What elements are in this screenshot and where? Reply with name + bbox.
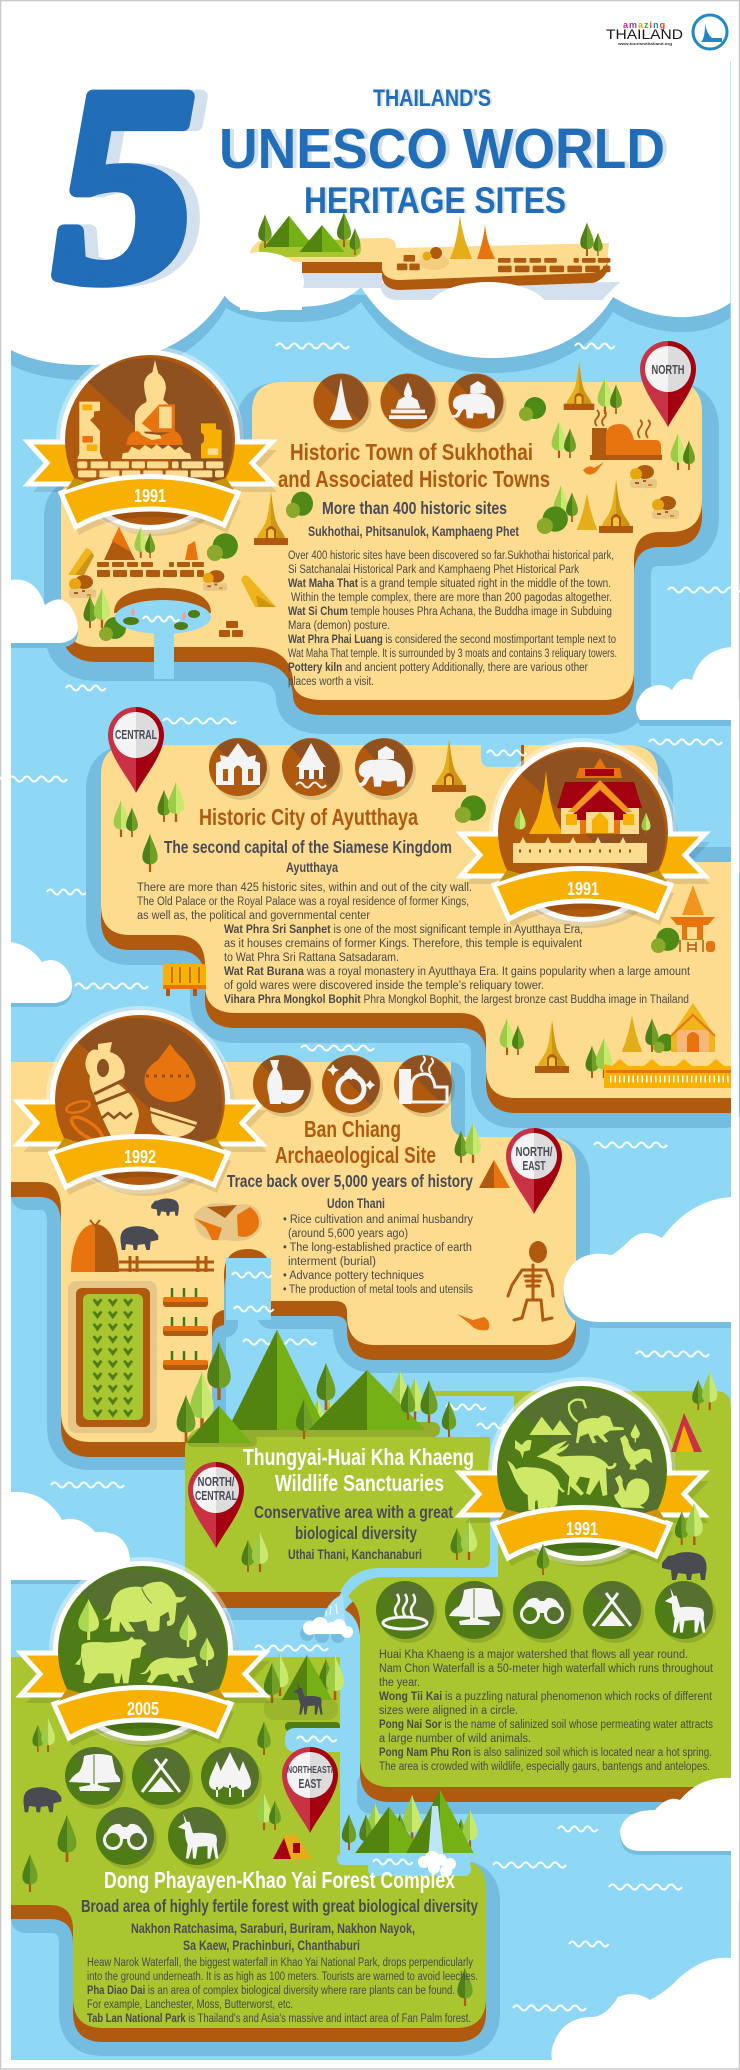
icon: forest trees bbox=[78, 1599, 214, 1666]
cloud: left 3 bbox=[11, 1492, 130, 1584]
pin label: EAST bbox=[522, 1158, 546, 1173]
body text: Ban Chiang: • The long-established practice of earth bbox=[283, 1242, 472, 1254]
header island bbox=[220, 212, 620, 342]
subheading: Ban Chiang: Udon Thani bbox=[327, 1195, 385, 1211]
heading: Sukhothai bbox=[278, 439, 550, 492]
illustrations: Ayutthaya upper bbox=[114, 739, 486, 872]
body text: Sukhothai: Pottery kiln and ancient pottery Additionally, there are various other bbox=[288, 662, 588, 674]
heading: Thungyai bbox=[243, 1444, 474, 1496]
subheading: Thungyai: biological diversity bbox=[295, 1523, 417, 1543]
body text: Ban Chiang: • Rice cultivation and animal husbandry bbox=[283, 1214, 473, 1226]
subheading: Ban Chiang bbox=[227, 1171, 473, 1211]
illustrations: Ban Chiang left bbox=[71, 1198, 262, 1272]
panel shadows bbox=[25, 399, 731, 2042]
logo: Amazing Thailand bbox=[606, 20, 683, 46]
pond and waterfall bbox=[114, 588, 211, 679]
panel 4: Thungyai land bbox=[185, 1391, 731, 1608]
body text: Sukhothai: Within the temple complex, there are more than 200 pagodas altogether. bbox=[291, 592, 612, 604]
panel 5: Dong Phayayen land bbox=[11, 1657, 486, 2042]
cloud: right 4 bbox=[551, 1958, 731, 2060]
subheading: Dong Phayayen bbox=[81, 1896, 478, 1953]
waterfall and mist cloud bbox=[300, 1594, 353, 1643]
subheading: Ayutthaya bbox=[164, 837, 452, 875]
pin: North/Central bbox=[188, 1462, 244, 1548]
title text: UNESCO WORLD bbox=[219, 117, 665, 181]
panel 3: Ban Chiang land bbox=[11, 1062, 576, 1457]
more waves over land notches bbox=[232, 750, 527, 1742]
stilt house bbox=[651, 885, 715, 953]
body text: Huai Kha Khaeng: sizes were aligned in a circle. bbox=[379, 1705, 518, 1717]
pin label: CENTRAL bbox=[195, 1488, 237, 1503]
body text: Dong Phayayen: Heaw Narok Waterfall, the biggest waterfall in Khao Yai National Park, drops perpendicularly bbox=[87, 1957, 473, 1969]
title text: THAILAND'S bbox=[375, 85, 493, 112]
badge: Ban Chiang 1992 bbox=[18, 1006, 267, 1196]
badge: Dong Phayayen 2005 bbox=[21, 1557, 270, 1747]
body text: Ayutthaya: Wat Phra Sri Sanphet is one of the most significant temple in Ayutthaya Era, bbox=[224, 924, 583, 936]
pin: Northeast/East bbox=[282, 1747, 338, 1833]
pin label bbox=[195, 1474, 237, 1503]
heading: Ban Chiang bbox=[275, 1116, 436, 1168]
pin label bbox=[516, 1144, 553, 1173]
body text: Ayutthaya: as well as, the political and governmental center bbox=[137, 910, 370, 922]
subheading: Ayutthaya: Ayutthaya bbox=[286, 859, 338, 875]
body text: Dong Phayayen: Pha Diao Dai is an area of complex biological diversity where rare plants can be found. bbox=[87, 1985, 455, 1997]
heading: Dong Phayayen: Dong Phayayen-Khao Yai Forest Complex bbox=[104, 1867, 455, 1893]
heading: Ayutthaya: Historic City of Ayutthaya bbox=[199, 804, 419, 830]
skeleton bbox=[508, 1241, 553, 1320]
panel 2: Ayutthaya land bbox=[101, 745, 731, 1113]
body text: Sukhothai: places worth a visit. bbox=[288, 676, 374, 688]
icon: seated Buddha bbox=[77, 360, 224, 477]
heading: Sukhothai: and Associated Historic Towns bbox=[278, 466, 550, 492]
subheading: Thungyai: Uthai Thani, Kanchanaburi bbox=[288, 1546, 422, 1562]
badge: Sukhothai 1991 bbox=[28, 346, 277, 536]
subheading: Dong Phayayen: Broad area of highly fertile forest with great biological diversity bbox=[81, 1896, 478, 1916]
title text: UNESCO WORLD bbox=[223, 117, 669, 181]
body text: Sukhothai: Mara (demon) posture. bbox=[288, 620, 390, 632]
title text: HERITAGE SITES bbox=[306, 180, 568, 221]
pin label: EAST bbox=[298, 1776, 322, 1791]
cloud: right 3 bbox=[620, 1778, 731, 1855]
body text: Sukhothai: Wat Phra Phai Luang is considered the second mostimportant temple next to bbox=[288, 634, 616, 646]
logo: tourism authority seal bbox=[693, 15, 727, 49]
pin label bbox=[287, 1765, 333, 1791]
title text: THAILAND'S bbox=[373, 85, 491, 112]
icons: Dong Phayayen bbox=[65, 1747, 262, 1869]
cloud: right 2 bbox=[564, 1197, 731, 1328]
water pool under waterfall bbox=[226, 1608, 358, 1657]
subheading: Ban Chiang: Trace back over 5,000 years of history bbox=[227, 1171, 473, 1191]
heading: Sukhothai: Historic Town of Sukhothai bbox=[290, 439, 533, 465]
bear bbox=[23, 1787, 61, 1812]
shadow trim at water edges bbox=[2, 700, 739, 2060]
icon: forest animals bbox=[75, 1582, 198, 1683]
body text: Ayutthaya: as it houses cremains of former Kings. Therefore, this temple is equivalent bbox=[224, 938, 583, 950]
panel 1: Sukhothai land bbox=[61, 382, 702, 715]
subheading: Sukhothai: Sukhothai, Phitsanulok, Kamphaeng Phet bbox=[308, 523, 519, 539]
heading: Ban Chiang: Ban Chiang bbox=[304, 1116, 401, 1142]
icons row: Sukhothai bbox=[313, 373, 506, 432]
body text: Ayutthaya: Wat Rat Burana was a royal monastery in Ayutthaya Era. It gains popularity when a large amount bbox=[224, 966, 691, 978]
illustrations: Ban Chiang right bbox=[455, 1122, 510, 1330]
body text: Dong Phayayen: For example, Lanchester, Moss, Butterworst, etc. bbox=[87, 1999, 293, 2011]
year: 1991 bbox=[567, 879, 599, 899]
body text: Sukhothai: Wat Maha That temple. It is surrounded by 3 moats and contains 3 reliquary towers. bbox=[288, 648, 617, 660]
body text: Ban Chiang: (around 5,600 years ago) bbox=[288, 1228, 408, 1240]
cloud: right 1 bbox=[636, 647, 731, 726]
body text: Sukhothai: Wat Maha That is a grand temple situated right in the middle of the town. bbox=[288, 578, 611, 590]
header sky cloud bbox=[11, 60, 730, 365]
subheading: Sukhothai: More than 400 historic sites bbox=[322, 498, 507, 518]
icon: temple and stupa bbox=[513, 758, 650, 863]
pin: North bbox=[640, 341, 696, 427]
title text: HERITAGE SITES bbox=[304, 180, 566, 221]
body text: Ban Chiang: interment (burial) bbox=[288, 1256, 376, 1268]
body text: Sukhothai: Si Satchanalai Historical Park and Kamphaeng Phet Historical Park bbox=[288, 564, 579, 576]
mountains bbox=[177, 1330, 456, 1443]
subheading: Dong Phayayen: Nakhon Ratchasima, Saraburi, Buriram, Nakhon Nayok, bbox=[131, 1920, 415, 1936]
icon: pottery vessels bbox=[65, 1042, 197, 1145]
body text: Huai Kha Khaeng: the year. bbox=[379, 1677, 420, 1689]
subheading: Thungyai: Conservative area with a great bbox=[254, 1502, 453, 1522]
tent bbox=[272, 1835, 312, 1859]
year: 1991 bbox=[134, 486, 166, 506]
panel 4: right forest land bbox=[343, 1437, 731, 1802]
cloud: left 1 bbox=[11, 580, 78, 648]
icons row: Ayutthaya bbox=[209, 738, 416, 800]
subheading: Ayutthaya: The second capital of the Siamese Kingdom bbox=[164, 837, 452, 857]
body text: Ayutthaya: There are more than 425 historic sites, within and out of the city wall. bbox=[137, 882, 472, 894]
body text: Ban Chiang: • The production of metal tools and utensils bbox=[283, 1284, 473, 1296]
body text: Huai Kha Khaeng: Nam Chon Waterfall is a 50-meter high waterfall which runs throughout bbox=[379, 1663, 714, 1675]
icons row: Ban Chiang bbox=[253, 1055, 455, 1117]
rice field bbox=[68, 1281, 157, 1433]
pin label: NORTH/ bbox=[516, 1144, 553, 1159]
title number 5: 5 bbox=[55, 31, 195, 338]
heading: Thungyai: Thungyai-Huai Kha Khaeng bbox=[243, 1444, 474, 1470]
year: 1992 bbox=[124, 1147, 156, 1167]
badge: Ayutthaya 1991 bbox=[461, 738, 710, 928]
body text: Sukhothai: Wat Si Chum temple houses Phra Achana, the Buddha image in Subduing bbox=[288, 606, 612, 618]
body text: Sukhothai: Over 400 historic sites have been discovered so far.Sukhothai historical park, bbox=[288, 550, 614, 562]
subheading: Dong Phayayen: Sa Kaew, Prachinburi, Chanthaburi bbox=[183, 1937, 360, 1953]
body text: Huai Kha Khaeng: Huai Kha Khaeng is a major watershed that flows all year round. bbox=[379, 1649, 688, 1661]
body text: Ban Chiang bbox=[283, 1214, 473, 1296]
pin label: NORTH bbox=[652, 362, 684, 377]
illustrations: centre forest bbox=[22, 1653, 473, 2006]
body text: Dong Phayayen bbox=[87, 1957, 478, 2025]
sky cloud shadow bbox=[11, 295, 730, 380]
heading: Thungyai: Wildlife Sanctuaries bbox=[275, 1470, 444, 1496]
illustrations: Sukhothai centre bbox=[254, 492, 313, 545]
subheading: Thungyai bbox=[254, 1502, 453, 1562]
icon: wildlife group bbox=[507, 1400, 652, 1510]
logo: Amazing Thailand: amazing bbox=[623, 20, 666, 30]
body text: Ayutthaya: to Wat Phra Sri Rattana Satsadaram. bbox=[224, 952, 399, 964]
illustrations: Ayutthaya lower right bbox=[500, 1003, 731, 1088]
body text: Sukhothai bbox=[288, 550, 617, 688]
body text: Ayutthaya: of gold wares were discovered inside the temple’s reliquary tower. bbox=[224, 980, 544, 992]
subheading: Sukhothai bbox=[308, 498, 519, 539]
blue edge line bbox=[730, 61, 731, 303]
year: 2005 bbox=[127, 1699, 159, 1719]
cloud: left 2 bbox=[11, 942, 72, 1007]
title text bbox=[219, 85, 669, 221]
badge: Thungyai 1991 bbox=[460, 1377, 709, 1567]
title number 5: 5 bbox=[68, 31, 208, 338]
illustrations: Sukhothai lower left bbox=[68, 527, 276, 641]
pin: Central bbox=[108, 707, 164, 793]
illustrations: Thungyai right side bbox=[537, 1372, 717, 1580]
logo: Amazing Thailand: www.tourismthailand.org bbox=[617, 41, 673, 46]
body text: Ayutthaya: The Old Palace or the Royal Palace was a royal residence of former Kings, bbox=[137, 896, 469, 908]
body text: Dong Phayayen: Tab Lan National Park is Thailand's and Asia's massive and intact area of Fan Palm forest. bbox=[87, 2013, 471, 2025]
year: 1991 bbox=[566, 1519, 598, 1539]
body text: Dong Phayayen: into the ground underneath. It is as high as 100 meters. Tourists are warned to avoid leeches. bbox=[87, 1971, 478, 1983]
body text: Ayutthaya bbox=[137, 882, 691, 1006]
body text: Huai Kha Khaeng: Wong Tii Kai is a puzzling natural phenomenon which rocks of different bbox=[379, 1691, 713, 1703]
jetty bbox=[163, 964, 206, 996]
body text: Ban Chiang: • Advance pottery techniques bbox=[283, 1270, 424, 1282]
pin label: NORTHEAST/ bbox=[287, 1765, 333, 1776]
illustrations: Thungyai trees bbox=[242, 1520, 477, 1572]
heading: Ban Chiang: Archaeological Site bbox=[275, 1142, 436, 1168]
pin: North/East bbox=[506, 1128, 562, 1214]
icons row: Huai Kha Khaeng bbox=[376, 1581, 716, 1643]
body text: Huai Kha Khaeng: a large number of wild animals. bbox=[379, 1733, 531, 1745]
planter beds bbox=[163, 1288, 208, 1370]
body text: Huai Kha Khaeng bbox=[379, 1649, 714, 1773]
pin label: NORTH/ bbox=[198, 1474, 235, 1489]
pool shadow bbox=[226, 1608, 343, 1620]
pin label: CENTRAL bbox=[115, 727, 157, 742]
illustrations: Sukhothai right bbox=[519, 362, 695, 534]
logo: Amazing Thailand: THAILAND bbox=[606, 26, 683, 42]
pond and mini landscape bbox=[337, 1790, 478, 1877]
body text: Ayutthaya: Vihara Phra Mongkol Bophit Phra Mongkol Bophit, the largest bronze cast Buddha image in Thailand bbox=[224, 994, 689, 1006]
